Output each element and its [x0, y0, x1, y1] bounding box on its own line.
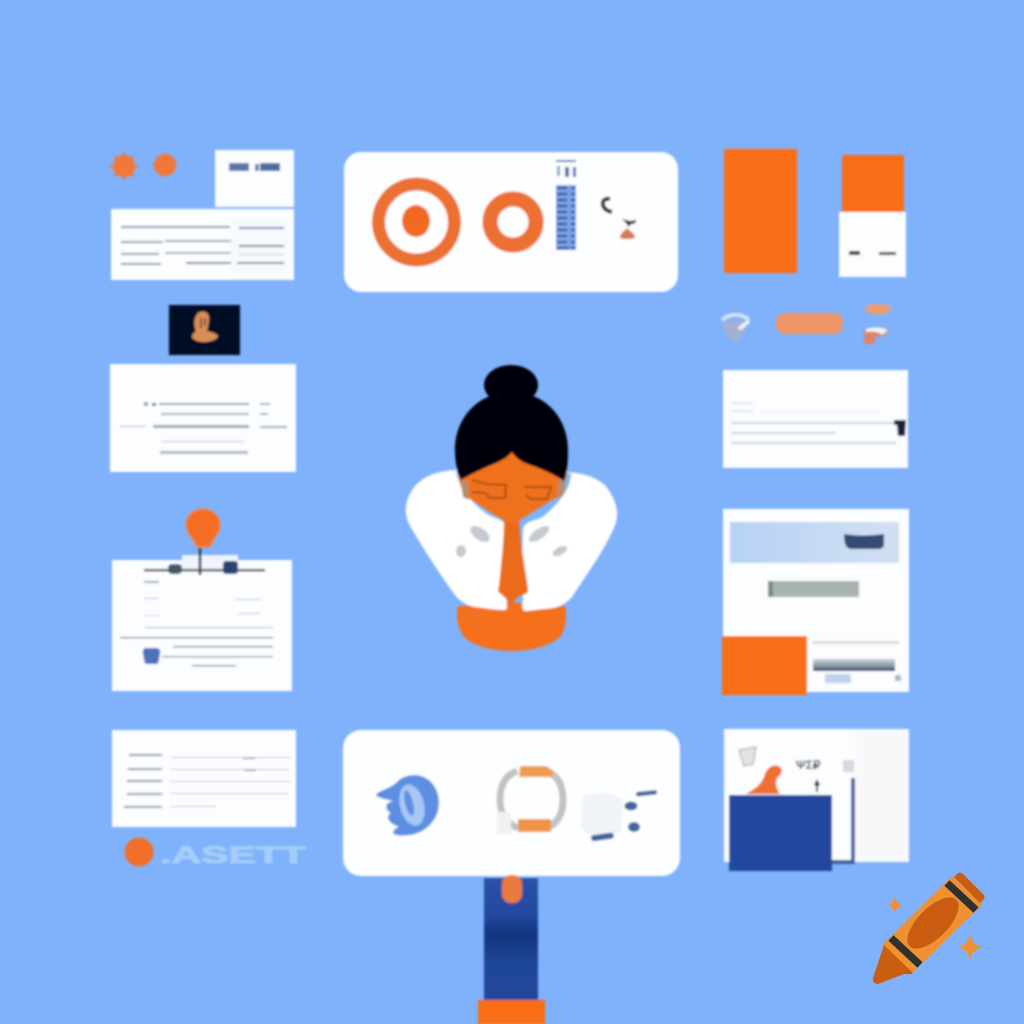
crayon bands	[891, 883, 976, 965]
panel: right dashboard card	[722, 509, 909, 695]
icon: crayon logo	[873, 872, 984, 984]
icons: two orange gears	[110, 152, 177, 180]
panel: right lower card	[724, 729, 909, 871]
sparkle	[887, 896, 903, 914]
icon: watch	[497, 766, 563, 834]
panel: left resume card	[112, 548, 292, 691]
icon: orange gear badge	[124, 838, 154, 866]
crayon oval	[899, 889, 967, 957]
bun	[484, 365, 538, 405]
figure: woman with bun	[406, 365, 617, 651]
panel: right text card	[723, 370, 908, 468]
panel: orange tall card	[724, 149, 797, 273]
panel: top center card	[344, 152, 678, 292]
block: orange square	[722, 636, 807, 695]
icon: blue globe	[376, 775, 439, 836]
panel: orange and white card	[839, 155, 906, 277]
panel: bottom center card	[343, 730, 680, 876]
chart: blue data column	[556, 160, 576, 250]
panel: left text card	[110, 364, 296, 472]
tie and neck	[498, 518, 528, 605]
panel: right lower card: ΨΣ₽	[796, 758, 821, 772]
face	[458, 434, 567, 524]
base: orange shoulders	[457, 601, 566, 651]
icon: ring	[490, 199, 536, 245]
sparkle large	[957, 933, 983, 961]
crayon body	[882, 876, 982, 974]
icon: small pointer glyph	[603, 199, 637, 239]
panel: top-left small card	[215, 150, 294, 207]
icon: light bulb and pin	[186, 509, 220, 547]
icon: black photo with orange hand	[169, 305, 240, 355]
icon row: faded pills	[722, 304, 891, 344]
icon: pale box with blue dashes	[581, 790, 657, 842]
glasses and eyes	[472, 480, 551, 499]
main composition	[110, 149, 909, 1024]
panel: top-left table card	[111, 209, 294, 280]
label: pale heading text: .ASETT	[160, 842, 307, 869]
crayon tip	[873, 945, 913, 984]
icon: target	[378, 184, 454, 260]
icon: orange figure	[746, 765, 782, 794]
hair	[455, 392, 568, 481]
ears	[460, 476, 566, 500]
crayon cap	[954, 872, 984, 903]
fold marks	[456, 523, 569, 558]
left wing: white collar	[406, 470, 507, 610]
strap: blue column with orange clasp	[478, 875, 545, 1024]
panel: left list card	[112, 730, 296, 827]
block: dark blue square	[729, 795, 832, 871]
right wing: white collar	[522, 472, 617, 611]
